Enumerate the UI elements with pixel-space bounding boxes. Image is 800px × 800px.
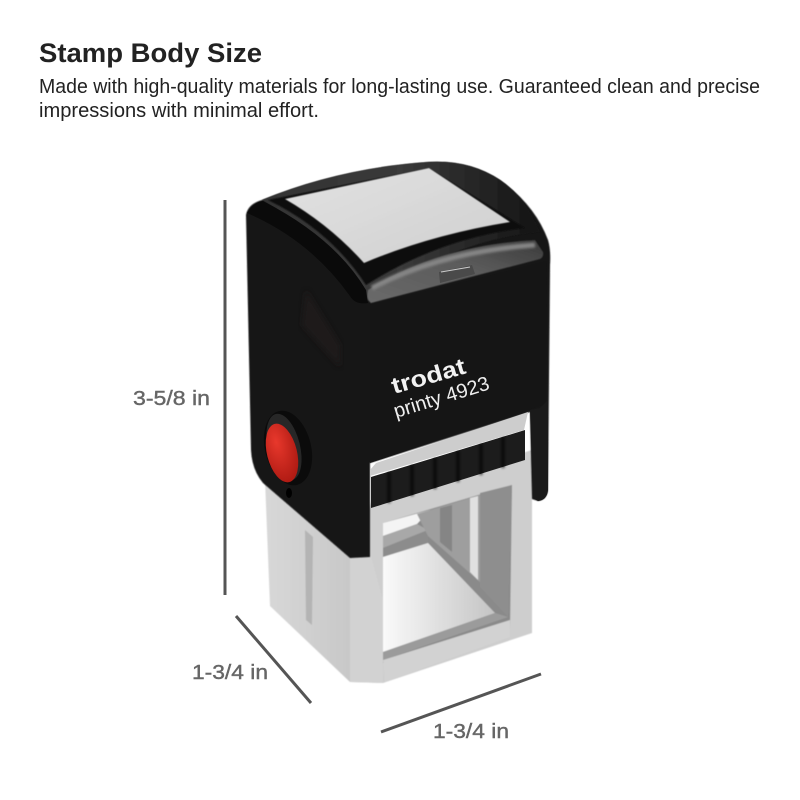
depth dimension line (236, 616, 311, 703)
stamp base: gray frame (265, 450, 532, 683)
glossy reflection (302, 290, 340, 367)
window latch (439, 265, 475, 283)
description text: impressions with minimal effort. (39, 100, 319, 122)
description text (39, 76, 760, 122)
description text: Made with high-quality materials for long-lasting use. Guaranteed clean and precise (39, 76, 760, 98)
button hole (286, 488, 292, 498)
stamp body: black casing (246, 162, 550, 558)
red button (256, 406, 320, 490)
title: Stamp Body Size (39, 38, 262, 68)
brand text: trodat (388, 353, 469, 399)
label panel on top (285, 168, 510, 263)
width label: 1-3/4 in (433, 721, 509, 743)
gray strip (370, 412, 528, 476)
cap top (262, 162, 540, 302)
depth label: 1-3/4 in (192, 662, 268, 684)
side tab (530, 400, 548, 501)
dark band around label (268, 168, 525, 285)
ribbed band (371, 430, 525, 508)
model text: printy 4923 (391, 373, 492, 423)
front panel (370, 261, 547, 463)
window highlight (372, 245, 535, 288)
stamp illustration (246, 162, 550, 683)
width dimension line (381, 674, 541, 732)
dark cap rim (247, 201, 368, 303)
height dimension line (224, 200, 226, 595)
height label: 3-5/8 in (133, 388, 210, 410)
clear window (367, 240, 543, 303)
stamp opening interior (383, 485, 512, 663)
